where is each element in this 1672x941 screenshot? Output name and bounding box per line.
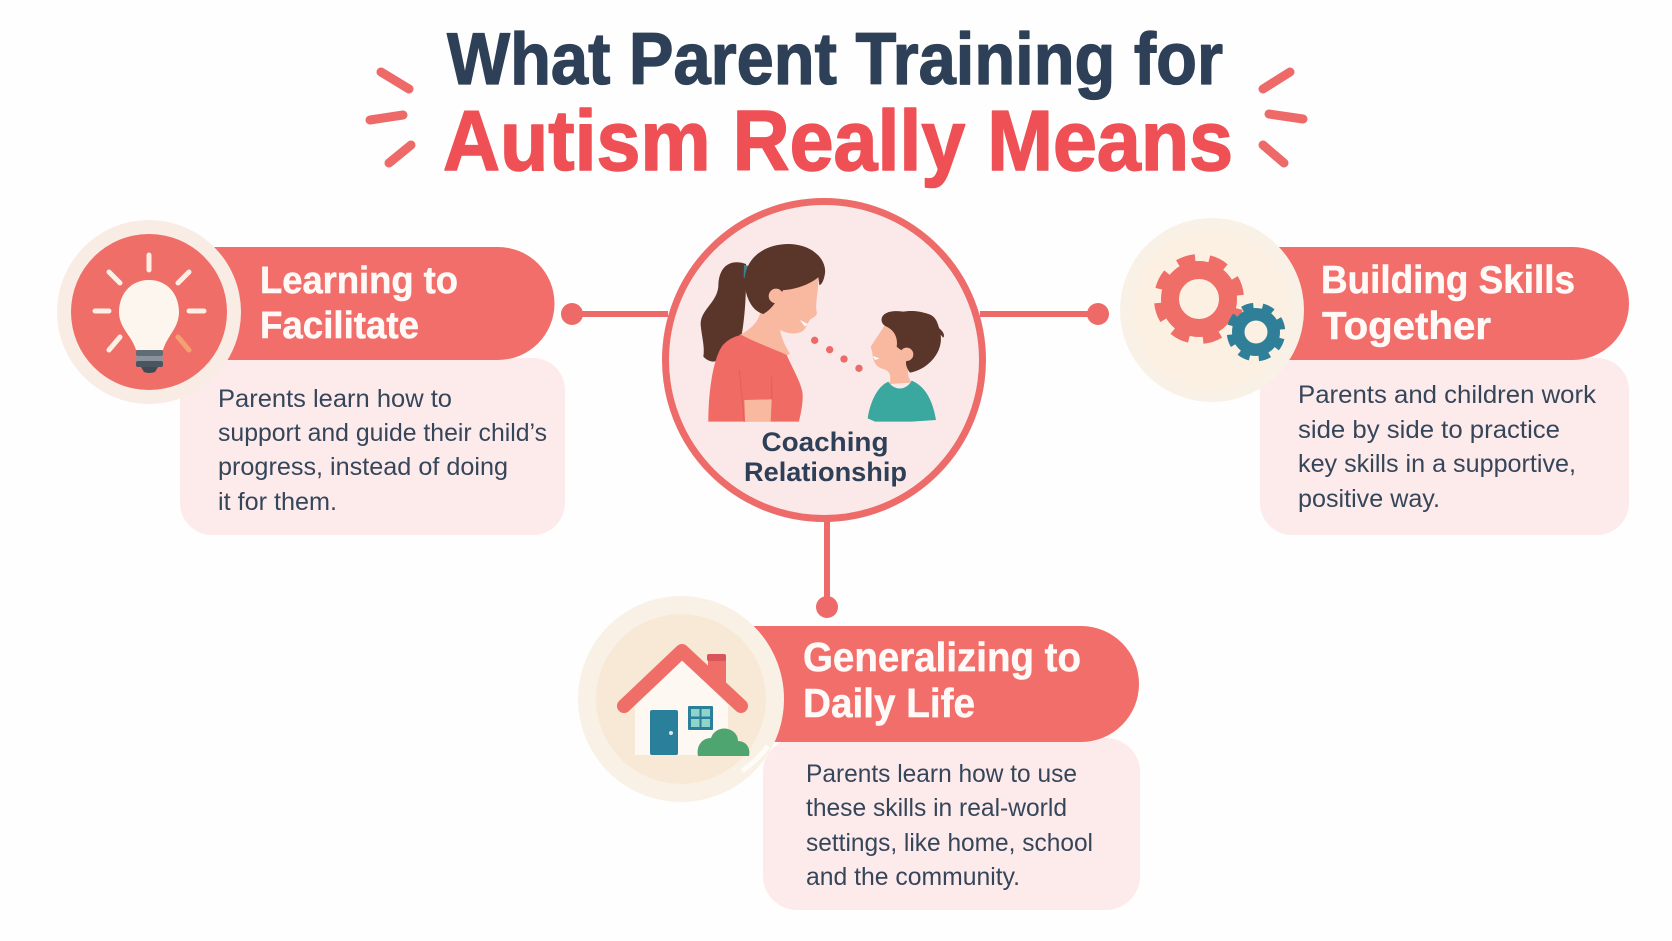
- icon: right title sparks: [1263, 72, 1303, 163]
- heading pill: [750, 626, 1139, 742]
- body card: settings, like home, school: [806, 829, 1093, 857]
- heading pill: Facilitate: [260, 305, 419, 347]
- body card: progress, instead of doing: [218, 453, 508, 481]
- connector: right: [980, 303, 1109, 325]
- body card: [1260, 358, 1629, 535]
- body card: and the community.: [806, 863, 1020, 891]
- title: [443, 19, 1233, 189]
- icon: house: [578, 596, 784, 802]
- panel: generalizing to daily life: [578, 596, 1140, 910]
- icon: left title sparks: [370, 72, 411, 163]
- body card: Parents and children work: [1298, 381, 1597, 409]
- body card: Parents learn how to use: [806, 760, 1077, 788]
- connector: left: [561, 303, 668, 325]
- title: What Parent Training for: [447, 19, 1223, 100]
- body card: [180, 358, 565, 535]
- label: coaching relationship: Relationship: [744, 457, 907, 487]
- connector: bottom: [816, 518, 838, 618]
- body card: [763, 738, 1140, 910]
- body card: support and guide their child’s: [218, 419, 547, 447]
- icon: gears: [1120, 218, 1304, 402]
- body card: positive way.: [1298, 485, 1440, 513]
- heading pill: Together: [1322, 305, 1491, 348]
- panel: learning to facilitate: [57, 220, 565, 535]
- heading pill: [190, 247, 554, 360]
- icon: light bulb: [57, 220, 241, 404]
- heading pill: Generalizing to: [803, 634, 1081, 680]
- body card: Parents learn how to: [218, 385, 452, 413]
- body card: these skills in real-world: [806, 794, 1067, 822]
- heading pill: [1270, 247, 1629, 360]
- panel: coaching relationship: [666, 202, 982, 518]
- title: Autism Really Means: [443, 94, 1233, 189]
- body card: side by side to practice: [1298, 416, 1560, 444]
- body card: it for them.: [218, 488, 337, 516]
- heading pill: Learning to: [260, 260, 458, 302]
- heading pill: Building Skills: [1321, 259, 1575, 302]
- illustration: parent and child talking: [701, 244, 944, 422]
- panel: building skills together: [1120, 218, 1629, 535]
- heading pill: Daily Life: [803, 680, 975, 726]
- label: coaching relationship: Coaching: [762, 427, 888, 457]
- body card: key skills in a supportive,: [1298, 450, 1576, 478]
- label: coaching relationship: [744, 427, 907, 487]
